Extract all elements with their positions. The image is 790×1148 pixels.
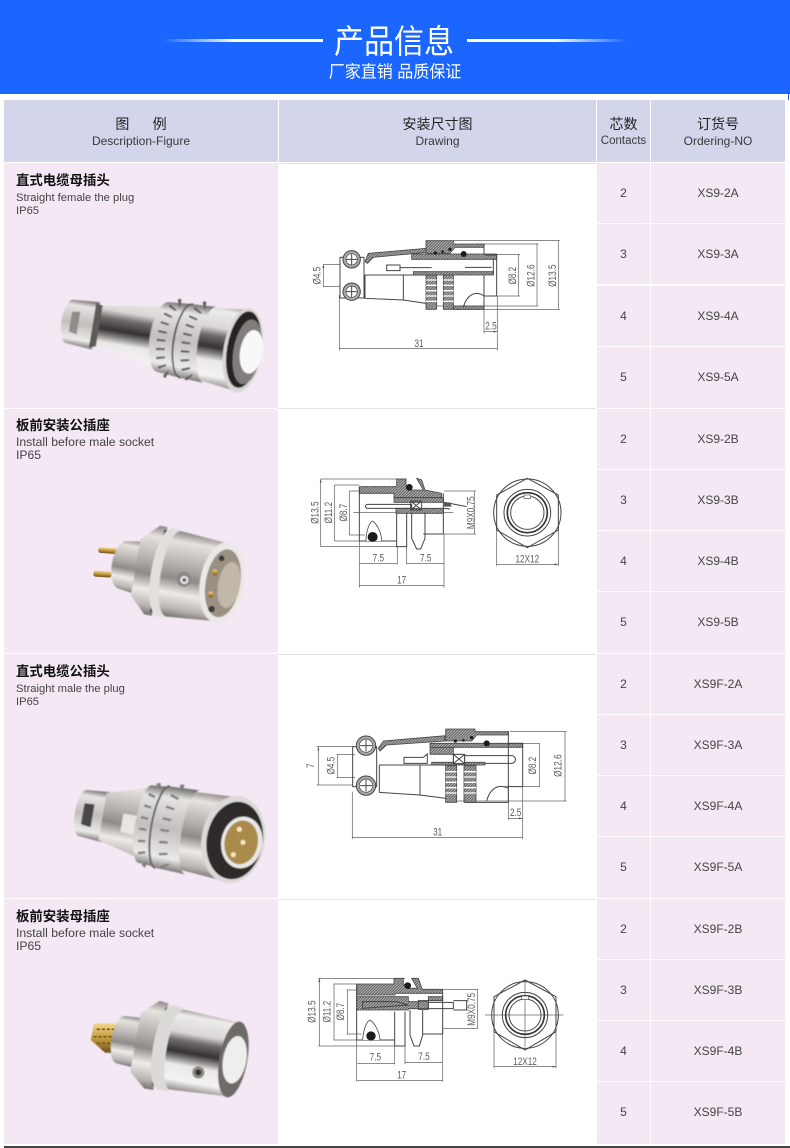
- description text: [16, 173, 134, 216]
- contacts: 3: 3: [620, 493, 627, 507]
- description text: IP65: [16, 204, 39, 216]
- technical drawing: female plug: Ø4.5: [312, 267, 324, 285]
- technical drawing: female plug: 31: [414, 338, 424, 350]
- technical drawing: male plug: 31: [433, 826, 442, 839]
- ordering number: [651, 1082, 785, 1144]
- ordering number: [651, 715, 785, 775]
- ordering number: [651, 899, 785, 959]
- header banner: [0, 0, 790, 94]
- contacts: 5: [597, 837, 650, 898]
- ordering number: XS9F-5B: [694, 1105, 742, 1119]
- technical drawing: male plug: Ø12.6: [553, 754, 565, 777]
- right edge blue sliver: [788, 94, 789, 100]
- technical drawing: female plug: Ø8.2: [507, 267, 519, 285]
- subtitle: 厂家直销 品质保证: [329, 63, 461, 82]
- contacts: 5: [597, 1082, 650, 1144]
- drawing cell: [278, 408, 596, 653]
- header cell: drawing: [279, 100, 596, 162]
- left title rule: [166, 39, 323, 42]
- panel: straight female cable plug: [4, 163, 785, 408]
- ordering number: XS9F-4B: [694, 1044, 742, 1058]
- contacts: 4: 4: [620, 554, 627, 568]
- ordering number: XS9-3A: [697, 247, 739, 261]
- ordering number: [651, 531, 785, 591]
- ordering number: XS9F-3B: [694, 983, 742, 997]
- technical drawing: female socket: 7.5: [418, 1051, 430, 1063]
- contacts: 2: 2: [620, 922, 627, 936]
- bottom rule: [4, 1146, 790, 1148]
- ordering number: XS9F-3A: [694, 738, 742, 752]
- table header: [4, 100, 785, 162]
- header cell: ordering number: Ordering-NO: [684, 134, 752, 148]
- description text: IP65: [16, 696, 39, 708]
- contacts: 4: [597, 531, 650, 591]
- description text: IP65: [16, 448, 41, 462]
- ordering number: XS9-5B: [697, 615, 739, 629]
- technical drawing: female plug: Ø13.5: [547, 264, 559, 287]
- technical drawing: male plug: 7: [305, 763, 317, 768]
- technical drawing: male socket: Ø11.2: [323, 502, 335, 524]
- ordering number: [651, 960, 785, 1020]
- ordering number: [651, 409, 785, 469]
- ordering number: [651, 1021, 785, 1081]
- technical drawing: female plug: 2.5: [485, 321, 497, 333]
- contacts: 2: [597, 163, 650, 223]
- contacts: 5: 5: [620, 370, 627, 384]
- title: 产品信息: [334, 24, 454, 61]
- technical drawing: male socket: 17: [397, 575, 406, 587]
- technical drawing: female socket: Ø8.7: [335, 1003, 347, 1021]
- ordering number: [651, 654, 785, 714]
- technical drawing: male socket: Ø13.5: [309, 501, 322, 524]
- technical drawing: male plug: 2.5: [510, 807, 521, 819]
- header cell: figure: 图 例: [115, 116, 167, 132]
- figure cell: [4, 409, 278, 653]
- ordering number: [651, 592, 785, 653]
- header cell: ordering number: 订货号: [697, 116, 739, 132]
- ordering number: XS9-3B: [697, 493, 739, 507]
- header cell: drawing: 安装尺寸图: [402, 116, 472, 132]
- description text: 直式电缆母插头: [16, 173, 110, 188]
- ordering number: [651, 470, 785, 530]
- technical drawing: female socket: Ø11.2: [322, 1001, 334, 1023]
- technical drawing: female socket: 12X12: [513, 1056, 537, 1068]
- contacts: 3: 3: [620, 738, 627, 752]
- contacts: 3: [597, 715, 650, 775]
- drawing cell: [278, 654, 596, 899]
- ordering number: XS9F-2B: [694, 922, 742, 936]
- ordering number: XS9F-5A: [694, 860, 742, 874]
- drawing cell: [278, 163, 596, 408]
- ordering number: [651, 776, 785, 836]
- panel: front-mounted female socket: [4, 899, 785, 1144]
- ordering number: [651, 837, 785, 898]
- contacts: 5: [597, 347, 650, 408]
- technical drawing: female plug: Ø12.6: [526, 264, 538, 287]
- contacts: 4: [597, 286, 650, 346]
- header cell: figure: Description-Figure: [92, 134, 190, 148]
- ordering number: XS9-5A: [697, 370, 739, 384]
- header cell: drawing: Drawing: [415, 134, 460, 148]
- photo: male plug connector: [74, 782, 266, 884]
- contacts: 5: 5: [620, 1105, 627, 1119]
- ordering number: XS9F-2A: [694, 677, 742, 691]
- description text: [16, 664, 125, 708]
- technical drawing: male plug: [305, 728, 567, 839]
- photo: male socket: [93, 525, 244, 622]
- contacts: 5: 5: [620, 615, 627, 629]
- contacts: 3: 3: [620, 247, 627, 261]
- description text: Install before male socket: [16, 926, 154, 940]
- technical drawing: female socket: 7.5: [370, 1052, 381, 1064]
- technical drawing: male socket: 12X12: [515, 554, 539, 566]
- panel: straight male cable plug: [4, 654, 785, 898]
- contacts: 5: 5: [620, 860, 627, 874]
- photo: female socket: [90, 1000, 250, 1098]
- description text: Straight female the plug: [16, 192, 134, 204]
- contacts: 4: 4: [620, 799, 627, 813]
- technical drawing: male socket: M9X0.75: [465, 496, 478, 529]
- description text: Install before male socket: [16, 435, 154, 449]
- technical drawing: female socket: [306, 978, 564, 1082]
- description text: Straight male the plug: [16, 683, 125, 695]
- description text: [16, 909, 154, 952]
- header cell: ordering number: [651, 100, 785, 162]
- ordering number: [651, 163, 785, 223]
- description text: IP65: [16, 938, 41, 952]
- contacts: 3: 3: [620, 983, 627, 997]
- contacts: 3: [597, 224, 650, 284]
- ordering number: [651, 347, 785, 408]
- technical drawing: male socket: 7.5: [420, 553, 431, 565]
- panel: front-mounted male socket: [4, 408, 785, 653]
- header cell: contacts: [597, 100, 650, 162]
- technical drawing: female socket: 17: [397, 1069, 406, 1082]
- technical drawing: male socket: Ø8.7: [338, 504, 350, 522]
- technical drawing: female plug: [312, 240, 560, 351]
- technical drawing: male plug: Ø4.5: [325, 757, 338, 775]
- description text: [16, 418, 154, 462]
- contacts: 4: 4: [620, 1044, 627, 1058]
- contacts: 2: 2: [620, 432, 627, 446]
- drawing cell: [278, 899, 596, 1144]
- header cell: contacts: Contacts: [601, 135, 646, 147]
- contacts: 2: 2: [620, 186, 627, 200]
- photo: female plug connector: [60, 298, 264, 393]
- technical drawing: male socket: [309, 478, 562, 588]
- figure cell: [4, 899, 278, 1144]
- technical drawing: male socket: 7.5: [373, 553, 384, 565]
- ordering number: XS9-4A: [697, 309, 739, 323]
- ordering number: XS9-4B: [697, 554, 739, 568]
- technical drawing: female socket: Ø13.5: [306, 1000, 319, 1023]
- contacts: 3: [597, 960, 650, 1020]
- ordering number: [651, 224, 785, 284]
- description text: 直式电缆公插头: [16, 664, 110, 679]
- technical drawing: female socket: M9X0.75: [466, 993, 478, 1026]
- ordering number: XS9-2A: [697, 186, 739, 200]
- right title rule: [467, 39, 624, 42]
- contacts: 4: 4: [620, 309, 627, 323]
- contacts: 4: [597, 1021, 650, 1081]
- contacts: 5: [597, 592, 650, 653]
- figure cell: [4, 654, 278, 898]
- contacts: 2: [597, 409, 650, 469]
- ordering number: [651, 286, 785, 346]
- contacts: 2: [597, 654, 650, 714]
- technical drawing: male plug: Ø8.2: [527, 757, 539, 775]
- contacts: 3: [597, 470, 650, 530]
- description text: 板前安装母插座: [16, 909, 110, 924]
- contacts: 2: 2: [620, 677, 627, 691]
- header cell: figure: [4, 100, 278, 162]
- figure cell: [4, 163, 278, 408]
- ordering number: XS9F-4A: [694, 799, 742, 813]
- contacts: 2: [597, 899, 650, 959]
- description text: 板前安装公插座: [16, 418, 110, 433]
- header cell: contacts: 芯数: [610, 116, 638, 132]
- contacts: 4: [597, 776, 650, 836]
- ordering number: XS9-2B: [697, 432, 739, 446]
